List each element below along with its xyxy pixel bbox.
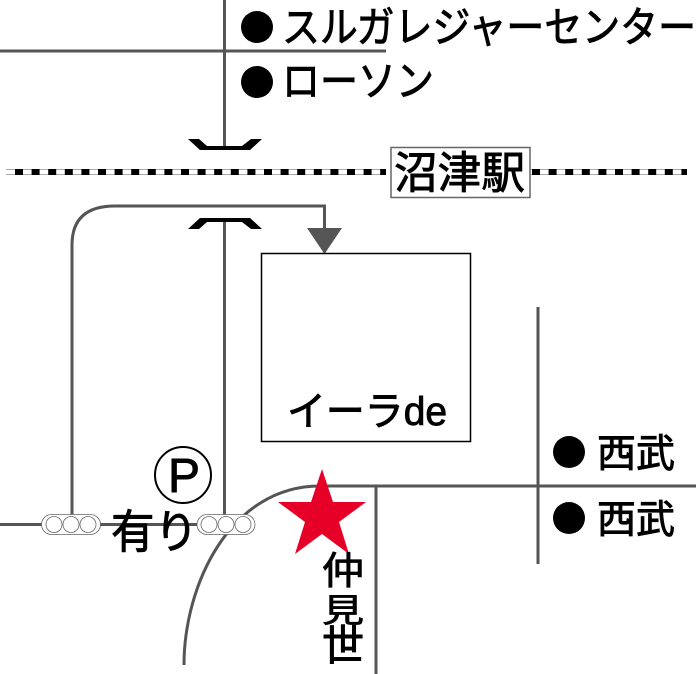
traffic light: east xyxy=(197,514,255,534)
landmark: 西武 lower: 西武 xyxy=(597,499,675,542)
underpass mark: south xyxy=(188,218,262,229)
road: west horizontal street xyxy=(0,523,200,526)
road: east vertical street xyxy=(536,307,540,564)
building: イーラde xyxy=(262,254,470,442)
building: イーラde: イーラde xyxy=(287,390,447,434)
road: main vertical street north of the station xyxy=(223,0,226,148)
street label: 仲見世: 仲 xyxy=(322,551,364,593)
underpass mark: north xyxy=(188,139,262,150)
parking label: P 有り: 有り xyxy=(111,506,198,558)
street label: 仲見世 xyxy=(322,551,364,669)
landmark: 西武 lower xyxy=(553,499,675,542)
road: curve and east horizontal street xyxy=(184,486,696,665)
road: top horizontal street xyxy=(0,50,386,52)
road: 仲見世 vertical street xyxy=(374,486,378,674)
star: destination marker xyxy=(278,469,366,554)
parking label: P 有り: P xyxy=(168,450,200,503)
parking label: P 有り xyxy=(111,447,211,558)
road: main vertical street south of the station xyxy=(223,219,226,518)
landmark: ローソン: ローソン xyxy=(282,58,434,105)
railway line xyxy=(6,170,687,174)
street label: 仲見世: 見 xyxy=(322,592,364,629)
traffic light: west xyxy=(42,514,100,534)
street label: 仲見世: 世 xyxy=(322,622,364,669)
landmark: 西武 upper xyxy=(553,433,675,476)
route to the parking entrance with arrow xyxy=(72,206,342,518)
landmark: 西武 upper: 西武 xyxy=(597,433,675,476)
station label: 沼津駅: 沼津駅 xyxy=(394,149,525,198)
